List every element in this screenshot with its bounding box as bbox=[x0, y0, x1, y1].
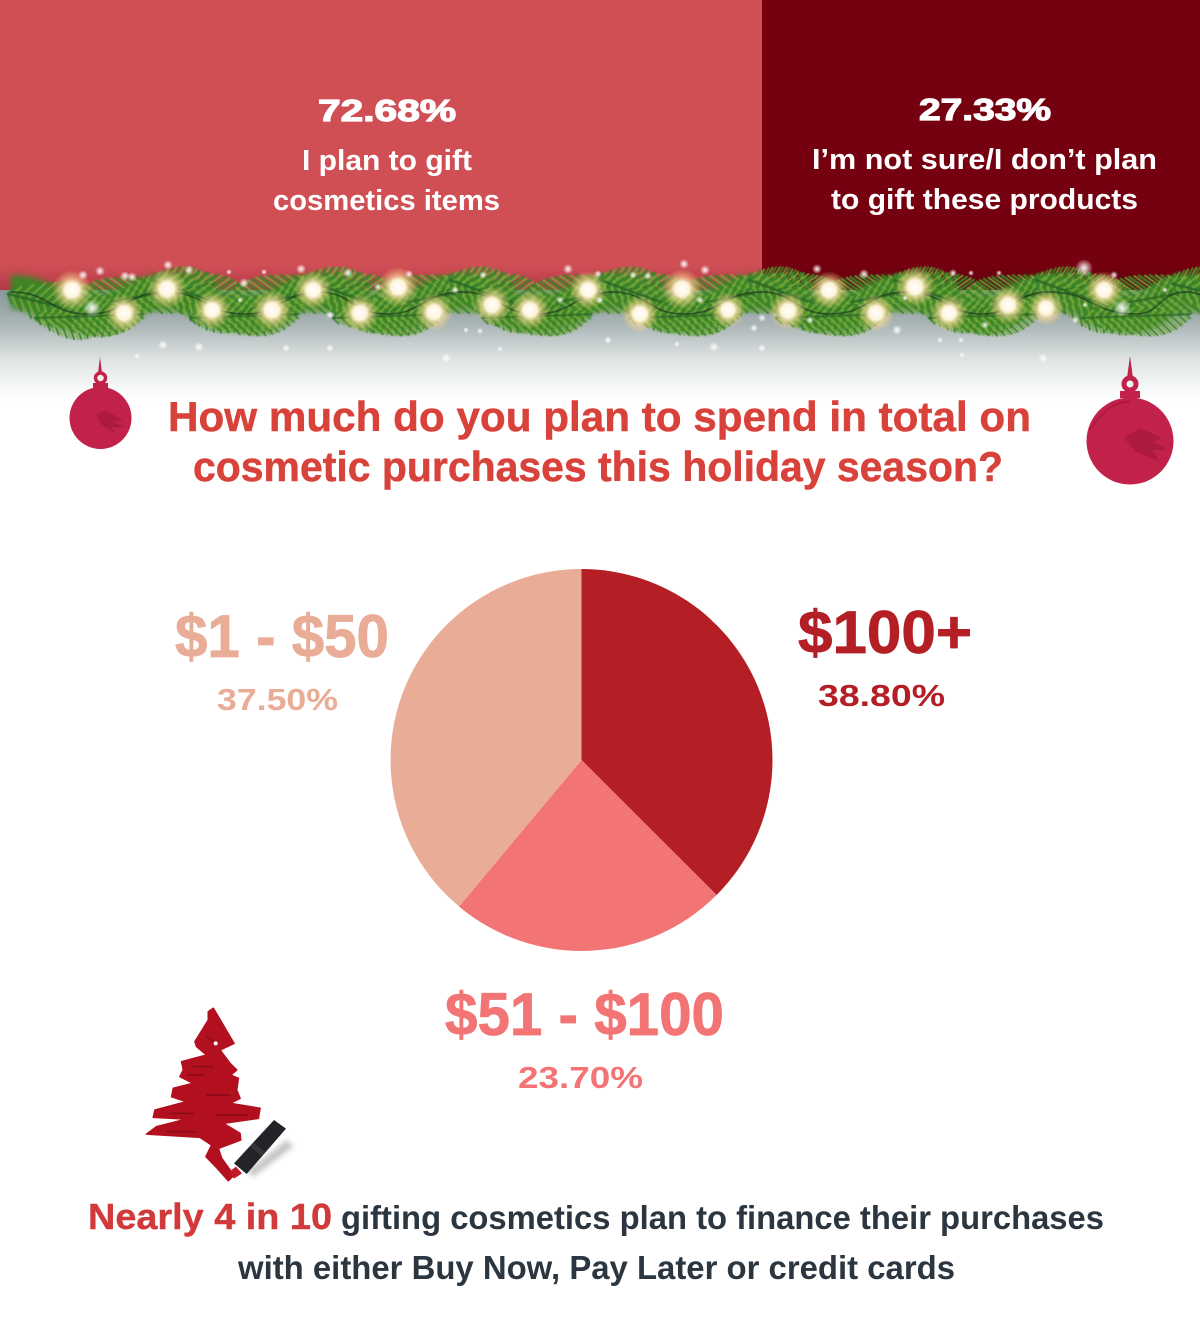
label: $1 - $50: $1 - $50 bbox=[175, 603, 389, 670]
callout line two: with either Buy Now, Pay Later or credit cards bbox=[237, 1249, 955, 1286]
panel: 72.68% plan to gift bbox=[0, 0, 762, 291]
label: cosmetics items: cosmetics items bbox=[273, 185, 500, 217]
snow sparkles bbox=[78, 259, 1168, 363]
panel: 27.33% not sure bbox=[762, 0, 1200, 291]
icon: large ornament right bbox=[1086, 356, 1174, 484]
slice: $100+ bbox=[582, 569, 772, 895]
icon: small ornament left bbox=[70, 357, 132, 449]
callout emphasis: Nearly 4 in 10 bbox=[88, 1196, 332, 1237]
label: not sure line two: to gift these products bbox=[831, 184, 1138, 216]
label: $100+ bbox=[798, 599, 972, 713]
stat: 72.68%: 72.68% bbox=[318, 93, 456, 128]
label: $1 - $50 bbox=[175, 603, 389, 717]
wire bbox=[11, 292, 1200, 314]
callout line one: gifting cosmetics plan to finance their purchases bbox=[341, 1199, 1104, 1236]
stat: 27.33%: 27.33% bbox=[919, 92, 1051, 127]
label: $51 - $100 bbox=[445, 981, 724, 1095]
label: not sure line one: I’m not sure/I don’t plan bbox=[812, 144, 1157, 176]
garland with lights bbox=[1, 254, 1200, 363]
lights bbox=[52, 267, 1123, 333]
snowy gradient band bbox=[0, 290, 1200, 402]
value: 37.50%: 37.50% bbox=[217, 682, 338, 717]
slice: $51 - $100 bbox=[459, 760, 717, 951]
label: $51 - $100: $51 - $100 bbox=[445, 981, 724, 1048]
slice: $1 - $50 bbox=[391, 569, 582, 906]
icon: lipstick tree bbox=[147, 1008, 293, 1181]
heading line two: cosmetic purchases this holiday season? bbox=[193, 443, 1003, 490]
heading line one: How much do you plan to spend in total on bbox=[168, 393, 1031, 440]
value: 23.70%: 23.70% bbox=[518, 1060, 643, 1095]
label: $100+: $100+ bbox=[798, 599, 972, 666]
pie chart bbox=[391, 569, 772, 951]
label: I plan to gift: I plan to gift bbox=[302, 145, 472, 177]
callout: financing bbox=[88, 1196, 1104, 1286]
heading bbox=[168, 393, 1031, 490]
value: 38.80%: 38.80% bbox=[818, 678, 945, 713]
